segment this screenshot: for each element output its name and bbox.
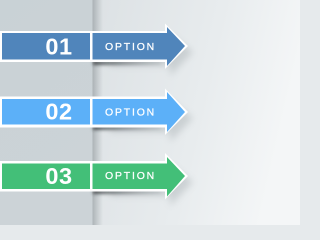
number 03: 03 xyxy=(45,163,73,189)
fold shadow xyxy=(92,0,103,225)
number box 03 xyxy=(2,164,90,189)
arrow body 1 xyxy=(92,27,185,66)
number box 01 xyxy=(2,33,90,60)
label option 1: OPTION xyxy=(105,41,156,53)
number box 02 xyxy=(2,99,90,124)
background: left panel xyxy=(0,0,92,225)
arrow 2 xyxy=(0,88,193,142)
arrow 1 xyxy=(0,24,193,76)
arrow body 2 xyxy=(92,92,185,132)
arrow body 3 xyxy=(92,157,185,196)
number 01: 01 xyxy=(45,34,73,60)
label option 3: OPTION xyxy=(105,170,156,182)
background: right panel xyxy=(92,0,300,225)
arrow 3 xyxy=(0,153,193,206)
number 02: 02 xyxy=(45,98,73,124)
label option 2: OPTION xyxy=(105,106,156,118)
